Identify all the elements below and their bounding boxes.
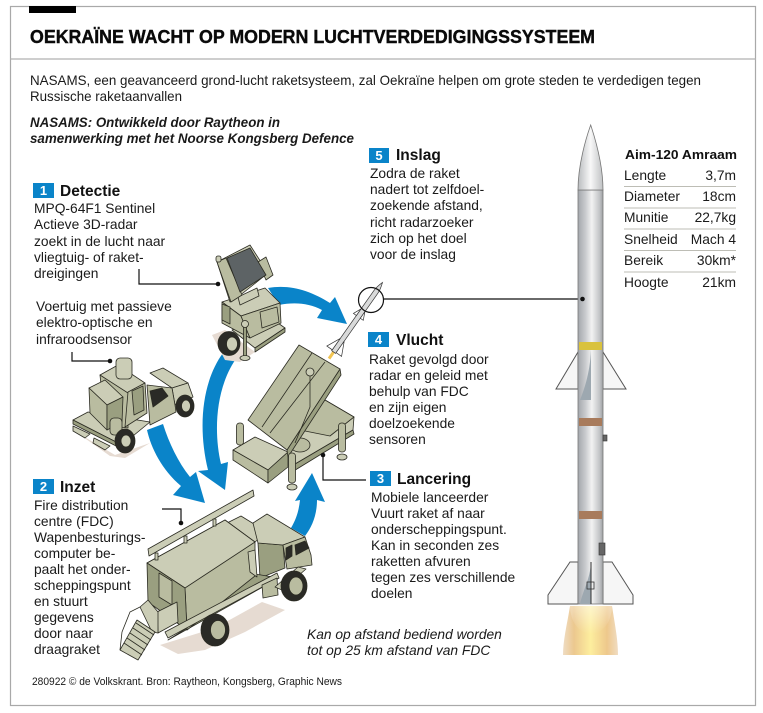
illustration: missile in flight — [322, 277, 390, 364]
step 1: detectie: MPQ-64F1 Sentinel — [34, 201, 155, 216]
spec table — [624, 147, 737, 290]
subtitle: samenwerking met het Noorse Kongsberg Defence — [30, 131, 354, 146]
callout: sensor vehicle text: Voertuig met passieve — [36, 299, 172, 314]
step 3: lancering: onderscheppingspunt. — [371, 522, 507, 537]
arrow: radar to missile — [268, 287, 347, 324]
missile diagram — [548, 125, 633, 655]
step 1: detectie: 1 — [40, 183, 47, 198]
step 4: vlucht: behulp van FDC — [369, 384, 469, 399]
spec table: Snelheid — [624, 232, 678, 247]
illustration: fire distribution centre truck — [120, 490, 312, 660]
intro text: NASAMS, een geavanceerd grond-lucht raketsysteem, zal Oekraïne helpen om grote steden te verdedigen tegen — [30, 72, 701, 88]
spec table: Aim-120 Amraam — [625, 147, 737, 162]
step 3: lancering: raketten afvuren — [371, 554, 471, 569]
step 2: inzet: computer be- — [34, 546, 115, 561]
callout: launcher leader — [321, 453, 366, 480]
step 5: inslag: voor de inslag — [370, 247, 456, 262]
step 5: inslag: Inslag — [396, 147, 441, 164]
spec table: Munitie — [624, 210, 669, 225]
spec table: Hoogte — [624, 275, 669, 290]
spec table: 3,7m — [705, 168, 736, 183]
intro text — [30, 72, 701, 104]
step 3: lancering: doelen — [371, 586, 412, 601]
note: remote operation — [307, 627, 502, 658]
footer source: 280922 © de Volkskrant. Bron: Raytheon, Kongsberg, Graphic News — [32, 676, 342, 688]
step 5: inslag: 5 — [375, 148, 383, 163]
arrow: radar to launcher — [198, 353, 238, 490]
step 4: vlucht: 4 — [375, 332, 383, 347]
step 2: inzet — [33, 479, 145, 657]
body — [578, 190, 603, 604]
step 3: lancering — [370, 471, 516, 601]
step 5: inslag: zich op het doel — [370, 231, 467, 246]
arrow: fire distribution centre to launcher — [291, 473, 325, 536]
step 4: vlucht: doelzoekende — [369, 416, 455, 431]
step 4: vlucht — [368, 332, 489, 447]
spec table: 18cm — [702, 189, 736, 204]
step 3: lancering: Vuurt raket af naar — [371, 506, 485, 521]
step 5: inslag: nadert tot zelfdoel- — [370, 182, 484, 197]
step 1: detectie — [33, 183, 166, 281]
step 2: inzet: centre (FDC) — [34, 514, 114, 529]
callout: sensor vehicle text — [36, 299, 172, 363]
intro text: Russische raketaanvallen — [30, 88, 182, 104]
callout: radar leader — [139, 269, 220, 286]
spec table: Bereik — [624, 253, 663, 268]
callout: fire distribution leader — [162, 509, 183, 525]
subtitle: NASAMS: Ontwikkeld door Raytheon in — [30, 115, 280, 130]
step 3: lancering: Kan in seconden zes — [371, 538, 499, 553]
step 1: detectie: dreigingen — [34, 266, 98, 281]
header accent tab — [29, 6, 76, 13]
fins — [556, 352, 626, 389]
step 4: vlucht: en zijn eigen — [369, 400, 446, 415]
step 5: inslag — [369, 147, 484, 262]
step 5: inslag: richt radarzoeker — [370, 215, 474, 230]
spec table: 30km* — [697, 253, 737, 268]
step 2: inzet: draagraket — [34, 642, 100, 657]
step 5: inslag: zoekende afstand, — [370, 198, 483, 213]
step 2: inzet: gegevens — [34, 610, 94, 625]
step 2: inzet: en stuurt — [34, 594, 88, 609]
subtitle — [30, 115, 354, 146]
step 2: inzet: Inzet — [60, 479, 95, 496]
step 2: inzet: door naar — [34, 626, 93, 641]
spec table: Mach 4 — [691, 232, 736, 247]
callout: sensor vehicle text: elektro-optische en — [36, 315, 153, 330]
spec table: 21km — [702, 275, 736, 290]
step 4: vlucht: radar en geleid met — [369, 368, 488, 383]
missile magnifier circle and leader — [358, 288, 582, 312]
step 2: inzet: paalt het onder- — [34, 562, 131, 577]
illustration: sensor vehicle — [73, 358, 194, 458]
step 5: inslag: Zodra de raket — [370, 166, 460, 181]
spec table: 22,7kg — [695, 210, 736, 225]
flame — [563, 606, 618, 655]
spec table: Lengte — [624, 168, 667, 183]
step 3: lancering: Mobiele lanceerder — [371, 490, 489, 505]
illustration: radar — [212, 245, 285, 362]
step 3: lancering: tegen zes verschillende — [371, 570, 516, 585]
step 3: lancering: Lancering — [397, 471, 471, 488]
note: remote operation: Kan op afstand bediend worden — [307, 627, 502, 642]
step 1: detectie: zoekt in de lucht naar — [34, 234, 166, 249]
step 2: inzet: Wapenbesturings- — [34, 530, 145, 545]
step 1: detectie: Detectie — [60, 183, 121, 200]
step 2: inzet: Fire distribution — [34, 498, 128, 513]
illustration: launcher — [233, 345, 354, 490]
step 1: detectie: Actieve 3D-radar — [34, 217, 138, 232]
step 4: vlucht: Vlucht — [396, 332, 443, 349]
arrow: vehicle to fire distribution centre — [147, 424, 205, 503]
note: remote operation: tot op 25 km afstand van FDC — [307, 643, 491, 658]
step 2: inzet: 2 — [40, 479, 47, 494]
step 3: lancering: 3 — [377, 471, 384, 486]
title: OEKRAÏNE WACHT OP MODERN LUCHTVERDEDIGINGSSYSTEEM — [30, 26, 595, 47]
step 2: inzet: scheppingspunt — [34, 578, 131, 593]
spec table: Diameter — [624, 189, 680, 204]
step 4: vlucht: Raket gevolgd door — [369, 352, 489, 367]
step 1: detectie: vliegtuig- of raket- — [34, 250, 144, 265]
callout: sensor vehicle text: infraroodsensor — [36, 332, 132, 347]
step 4: vlucht: sensoren — [369, 432, 426, 447]
